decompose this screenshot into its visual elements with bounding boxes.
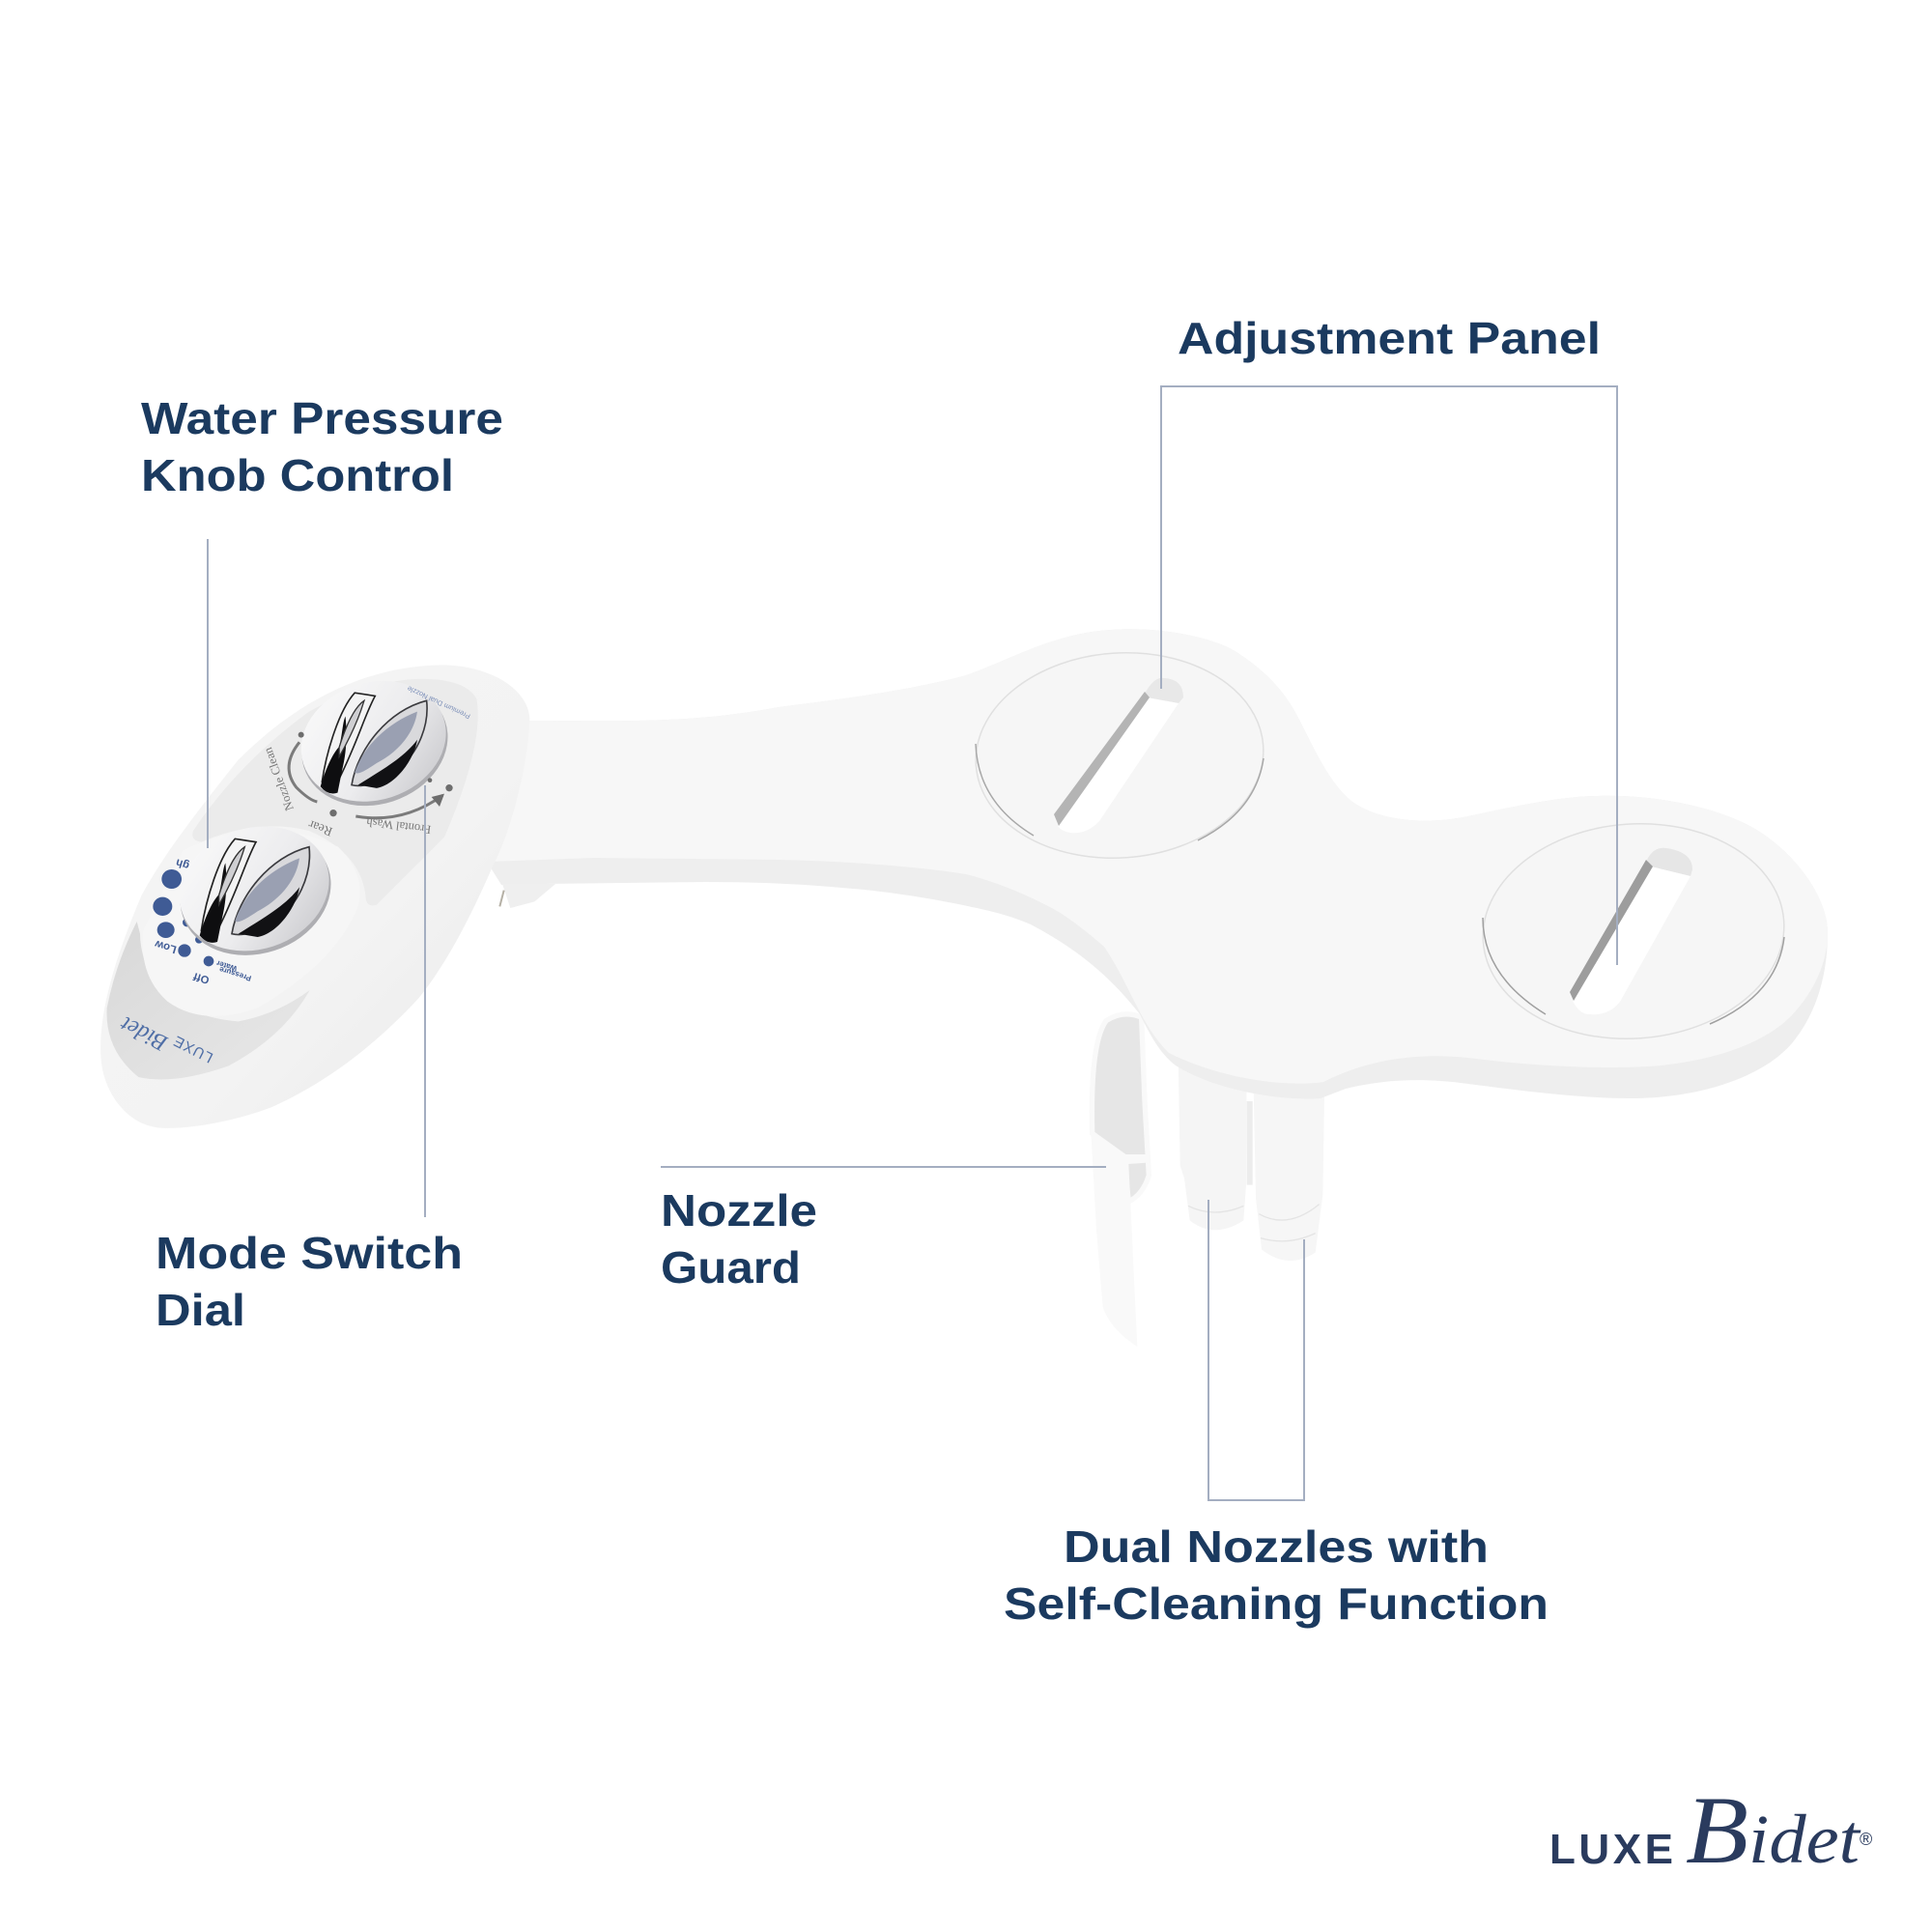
adjustment disc 2: [1476, 813, 1791, 1049]
mode dots: [298, 732, 453, 816]
nozzle left: [1178, 1037, 1247, 1230]
disc 2 shadow arcs: [1483, 918, 1784, 1024]
pressure labels: Water: [215, 958, 239, 973]
label: knob control: Knob Control: [141, 450, 454, 500]
slot 2: [1570, 848, 1692, 1014]
slot 1: [1054, 678, 1183, 833]
pressure labels: [154, 856, 252, 985]
device logo: Bidet: [116, 1010, 172, 1056]
disc 1 shadow arcs: [976, 744, 1264, 840]
label: dial: Dial: [156, 1285, 245, 1335]
arrow head: [432, 794, 444, 807]
plate top face: [487, 629, 1828, 1084]
brand logo: LUXE: [1549, 1826, 1673, 1873]
pressure knob: [163, 808, 348, 975]
leader: nozzle guard: [661, 1166, 1106, 1168]
label: guard: Guard: [661, 1242, 801, 1293]
product text premium: Premium Dual Nozzle: [406, 684, 471, 721]
mode switch knob: [285, 663, 464, 824]
brand logo: ®: [1860, 1830, 1872, 1849]
body shell: [100, 665, 529, 1128]
leader: dual nozzles: [1208, 1200, 1304, 1500]
pressure labels: Low: [154, 937, 178, 955]
leader: mode switch: [424, 785, 426, 1217]
bracket metal: [499, 891, 504, 906]
label: adjustment panel: Adjustment Panel: [1178, 313, 1601, 363]
brand logo: Bidet: [1686, 1776, 1861, 1884]
device logo: [116, 1010, 215, 1065]
frontal wash arc: [355, 795, 442, 818]
nozzle bands: [1188, 1205, 1320, 1241]
pressure knob base: [143, 830, 359, 1016]
mode labels: Rear: [306, 817, 334, 839]
plate side: [487, 629, 1828, 1099]
label: water pressure: Water Pressure: [141, 393, 503, 443]
label: mode switch: Mode Switch: [156, 1228, 463, 1278]
label: self-cleaning: Self-Cleaning Function: [1004, 1578, 1548, 1629]
nozzle gap: [1247, 1101, 1253, 1185]
bidet arm and mounting plate: [487, 629, 1828, 1099]
pressure labels: gh: [175, 856, 191, 871]
mode labels: Frontal Wash: [365, 815, 432, 837]
nozzle right: [1253, 1037, 1325, 1261]
arm bracket: [502, 884, 555, 908]
leader: water pressure: [207, 539, 209, 848]
mode labels: Nozzle Clean: [261, 745, 297, 812]
nozzle guard: [1091, 1014, 1151, 1347]
control face panel: [192, 679, 478, 905]
adjustment disc 1: [969, 643, 1270, 867]
leader: adjustment panel: [1161, 386, 1617, 965]
label: nozzle: Nozzle: [661, 1185, 817, 1236]
pressure labels: Off: [192, 970, 211, 985]
mode labels: [261, 745, 432, 839]
mode scale arcs: [289, 742, 317, 802]
brand logo: [1549, 1776, 1872, 1884]
lower pocket: [107, 922, 310, 1079]
pressure indicator dots: [153, 869, 213, 966]
pressure labels: Pressure: [217, 965, 252, 982]
dual nozzles: [1178, 1037, 1325, 1261]
device logo: LUXE: [171, 1032, 215, 1065]
control unit: [100, 663, 555, 1128]
label: dual nozzles: Dual Nozzles with: [1064, 1521, 1489, 1572]
